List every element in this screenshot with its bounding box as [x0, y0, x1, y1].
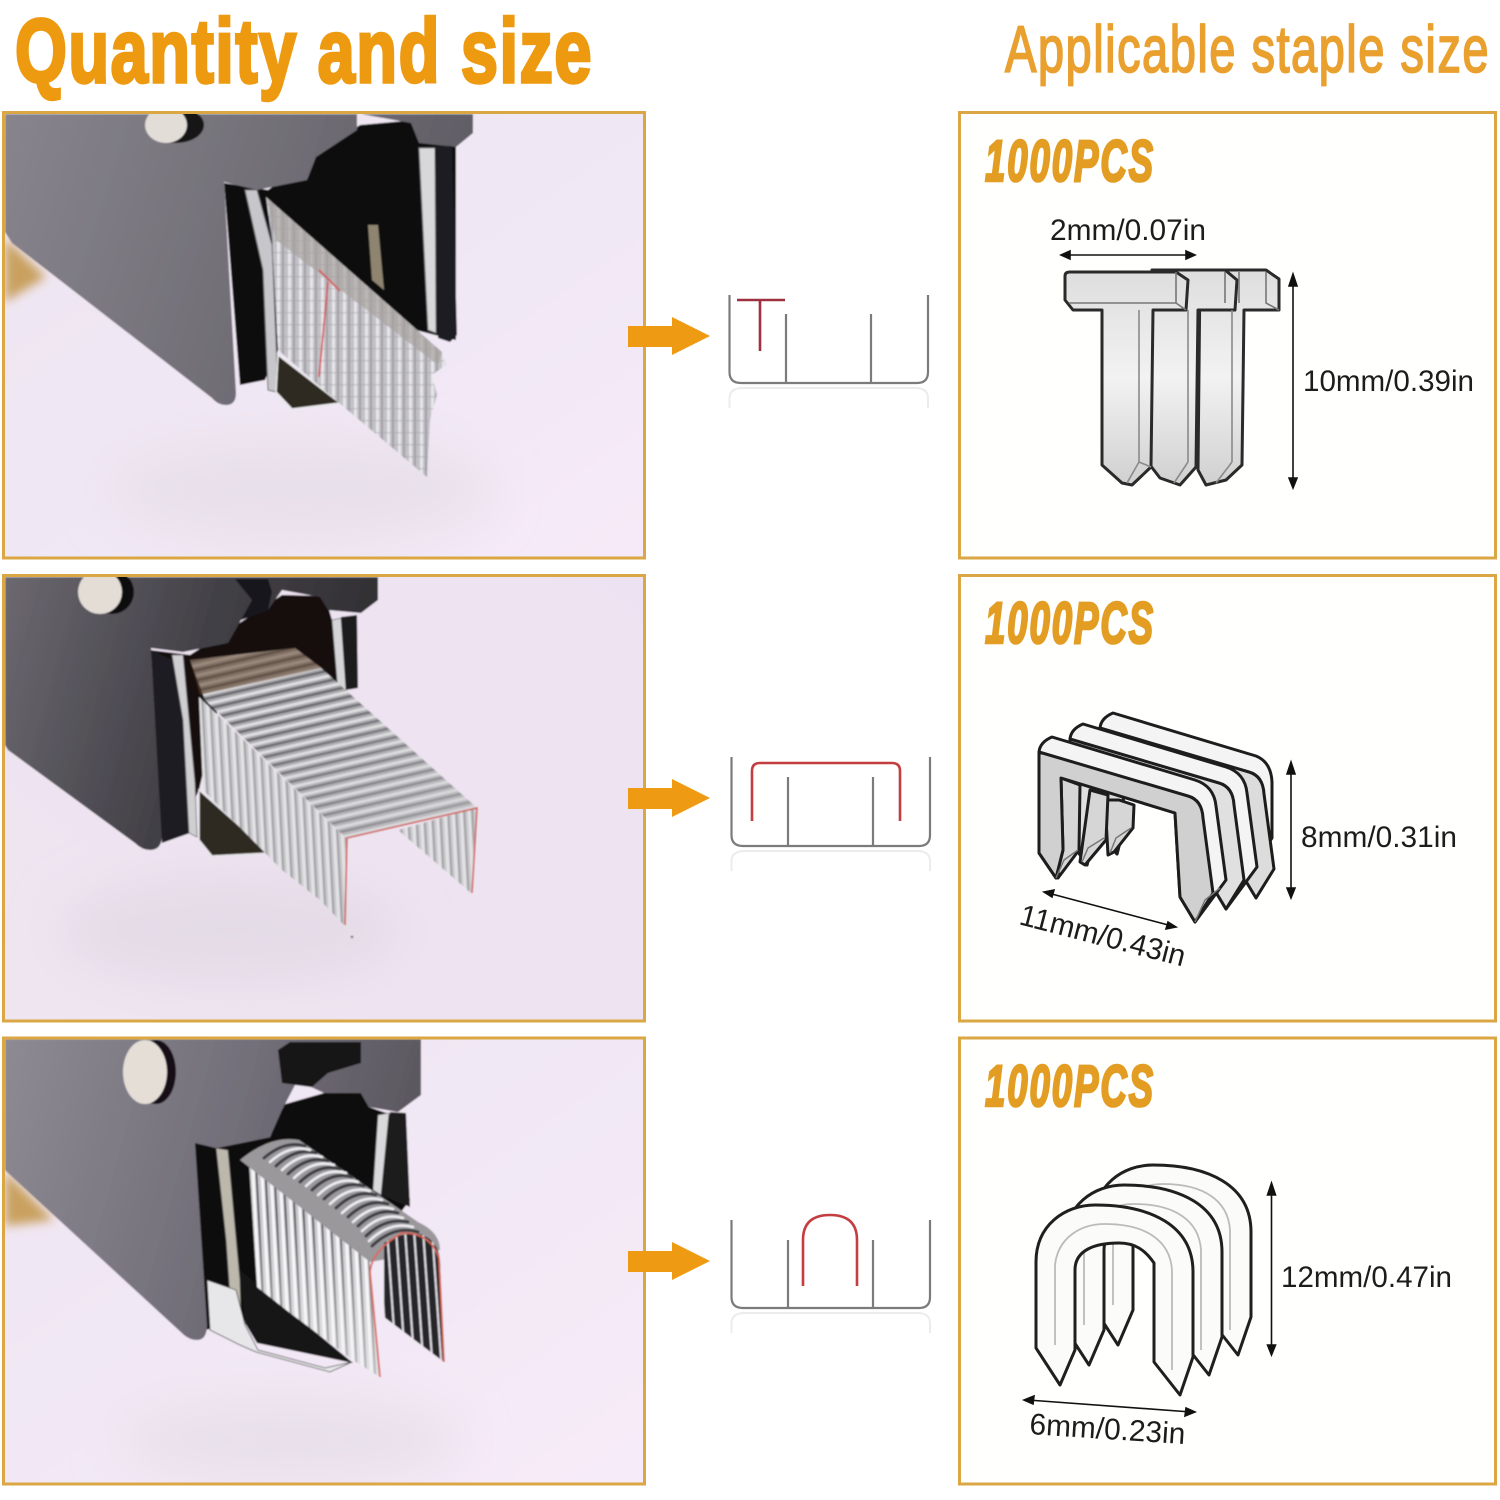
height dimension label: 10mm/0.39in — [1303, 365, 1474, 398]
panel: photo of T-nail strip in staple gun — [4, 107, 645, 558]
tool body — [5, 114, 473, 405]
rivet — [144, 114, 204, 144]
red staple outline — [345, 808, 477, 925]
U staples illustration — [1039, 713, 1274, 922]
round staples illustration — [1036, 1165, 1251, 1395]
reflection — [732, 1313, 930, 1333]
height dimension arrow — [1268, 1183, 1276, 1355]
under shine — [199, 790, 270, 856]
nail strip — [266, 197, 446, 477]
reflection — [732, 851, 930, 871]
T nails illustration — [1065, 270, 1279, 485]
panel: round staple size — [960, 1038, 1496, 1484]
right chrome rail — [373, 1113, 389, 1195]
shadow under tool — [110, 900, 352, 960]
wood handle behind tool — [5, 1171, 54, 1226]
red staple outline — [370, 1233, 444, 1377]
staple top ridges — [190, 648, 477, 838]
width dimension arrow — [1061, 251, 1195, 259]
right black rail — [341, 615, 358, 690]
left chrome rail — [216, 1148, 242, 1345]
width dimension arrow — [1024, 1396, 1195, 1416]
width dimension label: 11mm/0.43in — [1016, 899, 1189, 973]
nail strip head band — [266, 197, 442, 365]
diagram: T nail profile in staple tray — [730, 295, 928, 408]
left black rail — [151, 650, 190, 843]
black latch detail — [235, 579, 272, 620]
title: Quantity and size: Quantity and size — [15, 2, 593, 102]
left chrome rail — [245, 190, 277, 392]
black latch — [278, 1042, 361, 1087]
arrow: row 1 — [628, 317, 710, 355]
staple side face — [199, 697, 346, 925]
photo panel frames — [4, 112, 644, 1484]
tool body — [5, 1039, 421, 1340]
brown ridge reflection — [190, 648, 322, 695]
shadow under tool — [156, 1409, 429, 1472]
reflection — [730, 388, 928, 408]
staple inner legs — [384, 1234, 444, 1362]
speck — [351, 936, 353, 938]
quantity label: 1000PCS — [985, 1054, 1155, 1119]
panel: photo of round staple strip in staple gun — [4, 1038, 645, 1485]
panel: T nail size — [960, 112, 1496, 558]
shadow under tool — [150, 450, 456, 531]
panel: photo of U staple strip in staple gun — [4, 570, 645, 1021]
right black rail — [382, 1112, 410, 1207]
height dimension label: 12mm/0.47in — [1281, 1261, 1452, 1294]
wood handle behind tool — [5, 238, 46, 302]
tool interior — [224, 120, 456, 385]
diagram: U staple profile in staple tray — [732, 757, 930, 871]
side face fade — [249, 1163, 380, 1377]
under shine — [207, 1280, 352, 1372]
width dimension label: 6mm/0.23in — [1029, 1408, 1186, 1451]
right chrome rail — [332, 618, 346, 692]
interior — [150, 594, 338, 797]
red round profile — [803, 1215, 857, 1286]
rivet — [77, 577, 134, 616]
panel: U staple size — [960, 576, 1496, 1021]
height dimension arrow — [1287, 762, 1295, 898]
height dimension arrow — [1289, 274, 1297, 488]
staple inner leg — [398, 808, 476, 893]
under shine — [276, 355, 340, 409]
staple curved ridges — [240, 1139, 440, 1262]
interior — [190, 1093, 410, 1330]
right black rail — [435, 146, 457, 342]
red U profile — [752, 763, 900, 821]
red T outline — [319, 270, 340, 377]
quantity label: 1000PCS — [985, 591, 1155, 656]
width dimension label: 2mm/0.07in — [1050, 214, 1206, 247]
right chrome rail — [419, 148, 436, 333]
width dimension arrow — [1044, 890, 1176, 929]
quantity label: 1000PCS — [985, 129, 1155, 194]
red T profile — [737, 300, 785, 351]
rivet — [123, 1040, 176, 1104]
height dimension label: 8mm/0.31in — [1301, 821, 1457, 854]
inner legs — [1105, 800, 1134, 855]
back glint — [368, 225, 384, 290]
under shadow — [240, 1270, 353, 1363]
arrow: row 2 — [628, 779, 710, 817]
ridge fade — [274, 704, 472, 834]
diagram: round staple profile in staple tray — [732, 1215, 930, 1333]
tool body — [5, 577, 378, 850]
left chrome rail — [172, 655, 197, 837]
arrow: row 3 — [628, 1242, 710, 1280]
staple side face — [249, 1163, 380, 1377]
